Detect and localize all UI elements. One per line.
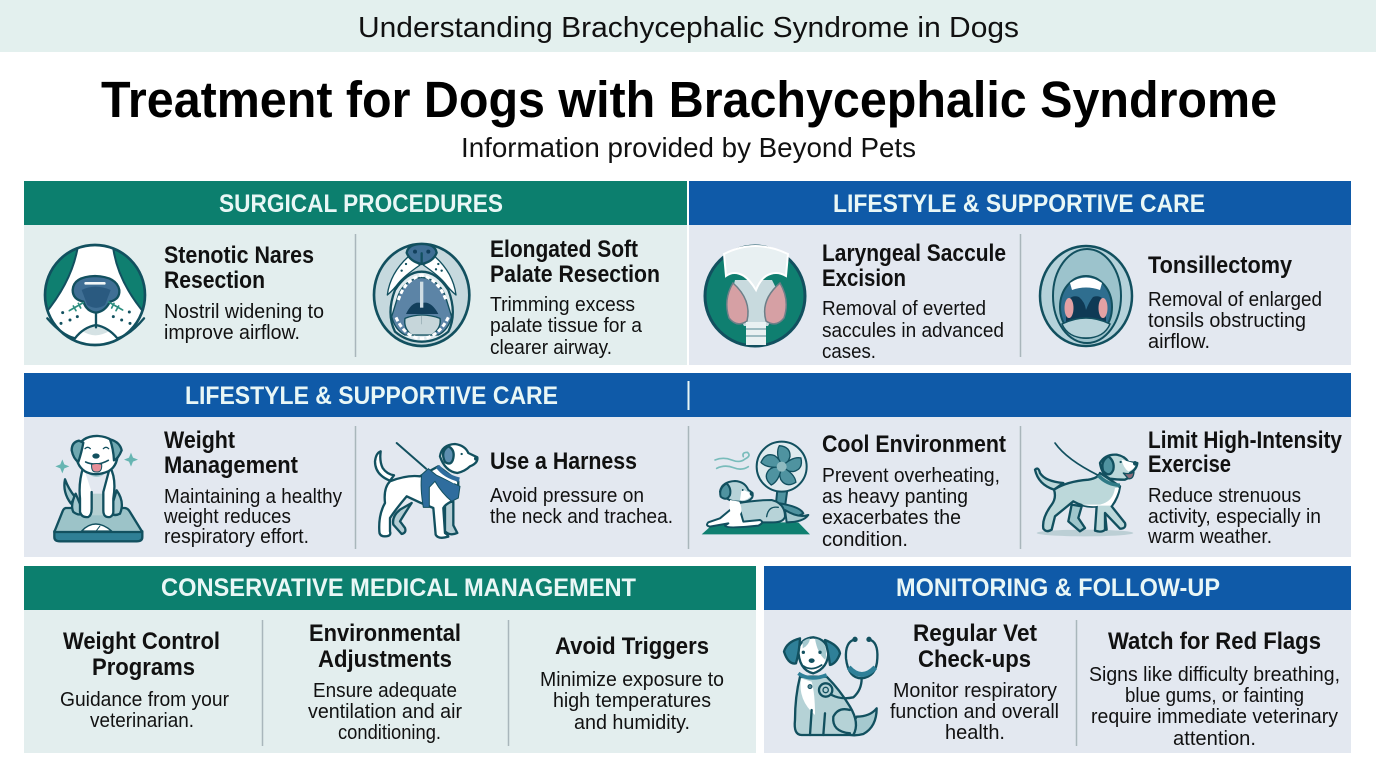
panel: monitoring and follow-up	[764, 566, 1351, 753]
text: regular vet check-ups: Monitor respiratory	[893, 679, 1058, 702]
icon: open mouth palate	[374, 244, 469, 346]
text: environmental adjustments	[308, 620, 462, 744]
heading: lifestyle and supportive care: LIFESTYLE & SUPPORTIVE CARE	[185, 382, 558, 410]
text: laryngeal saccule excision: saccules in advanced	[822, 319, 1004, 342]
text: avoid triggers: Minimize exposure to	[540, 668, 724, 691]
text: cool environment: as heavy panting	[822, 485, 968, 508]
text: laryngeal saccule excision: Removal of everted	[822, 297, 986, 320]
text: use a harness: Avoid pressure on	[490, 484, 644, 507]
text: stenotic nares resection: improve airflow.	[164, 321, 300, 344]
text: weight management: weight reduces	[163, 505, 291, 528]
text: regular vet check-ups: health.	[945, 721, 1005, 744]
text: weight control programs: Guidance from your	[60, 688, 229, 711]
text: watch for red flags: blue gums, or fainting	[1125, 684, 1304, 707]
panel: conservative medical management	[24, 566, 756, 753]
text: cool environment: exacerbates the	[822, 506, 961, 529]
panel: lifestyle and supportive care, top	[689, 181, 1351, 365]
text: tonsillectomy: Removal of enlarged	[1148, 288, 1322, 311]
text: elongated soft palate resection: clearer airway.	[490, 336, 612, 359]
text: weight control programs: veterinarian.	[90, 709, 194, 732]
text: weight control programs	[60, 628, 229, 732]
top banner: Understanding Brachycephalic Syndrome in Dogs	[358, 12, 1019, 44]
text: limit high-intensity exercise: Reduce strenuous	[1148, 484, 1301, 507]
text: laryngeal saccule excision	[822, 240, 1006, 363]
text: limit high-intensity exercise: Exercise	[1148, 451, 1231, 478]
text: weight management: respiratory effort.	[164, 525, 309, 548]
text: cool environment: Cool Environment	[822, 431, 1006, 458]
icon: dog resting by a fan	[702, 442, 810, 534]
heading: lifestyle and supportive care	[689, 181, 1351, 225]
text: weight management: Maintaining a healthy	[164, 485, 343, 508]
panel: surgical procedures	[24, 181, 687, 365]
text: regular vet check-ups	[890, 620, 1059, 744]
heading: surgical procedures: SURGICAL PROCEDURES	[219, 190, 503, 218]
text: use a harness: Use a Harness	[490, 448, 637, 475]
heading: monitoring and follow-up: MONITORING & FOLLOW-UP	[896, 574, 1220, 602]
text: weight control programs: Weight Control	[63, 628, 220, 655]
text: weight management	[163, 427, 343, 548]
icon: dog nose	[44, 243, 146, 350]
text: environmental adjustments: Ensure adequate	[313, 679, 457, 702]
heading: conservative medical management: CONSERVATIVE MEDICAL MANAGEMENT	[161, 574, 636, 602]
text: limit high-intensity exercise	[1147, 427, 1342, 548]
subtitle: Information provided by Beyond Pets	[461, 132, 916, 163]
text: elongated soft palate resection: palate tissue for a	[490, 314, 643, 337]
text: regular vet check-ups: Regular Vet	[913, 620, 1037, 647]
text: watch for red flags: require immediate veterinary	[1091, 705, 1339, 728]
text: stenotic nares resection: Nostril widening to	[164, 300, 324, 323]
icon: larynx	[705, 246, 805, 346]
text: cool environment	[822, 431, 1006, 551]
text: tonsillectomy: airflow.	[1148, 330, 1210, 353]
text: stenotic nares resection: Resection	[164, 267, 265, 294]
text: laryngeal saccule excision: Excision	[822, 265, 906, 292]
text: environmental adjustments: Environmental	[309, 620, 461, 647]
text: use a harness: the neck and trachea.	[490, 505, 673, 528]
text: tonsillectomy: Tonsillectomy	[1148, 252, 1292, 279]
heading: lifestyle and supportive care: LIFESTYLE & SUPPORTIVE CARE	[833, 190, 1205, 218]
text: tonsillectomy	[1148, 252, 1322, 353]
text: regular vet check-ups: Check-ups	[918, 646, 1031, 673]
text: environmental adjustments: Adjustments	[318, 646, 452, 673]
icon: dog on weighing scale	[54, 436, 142, 541]
text: limit high-intensity exercise: activity, especially in	[1148, 505, 1321, 528]
heading: monitoring and follow-up	[764, 566, 1351, 610]
text: avoid triggers: Avoid Triggers	[555, 633, 709, 660]
icon: dog with harness	[375, 443, 478, 538]
text: elongated soft palate resection	[490, 236, 660, 359]
text: stenotic nares resection	[164, 242, 324, 344]
heading: surgical procedures	[24, 181, 687, 225]
text: watch for red flags: Watch for Red Flags	[1108, 628, 1321, 655]
text: watch for red flags	[1089, 628, 1340, 750]
text: use a harness	[490, 448, 673, 528]
text: watch for red flags: Signs like difficulty breathing,	[1089, 663, 1340, 686]
text: stenotic nares resection: Stenotic Nares	[164, 242, 314, 269]
text: laryngeal saccule excision: Laryngeal Saccule	[822, 240, 1006, 267]
heading: conservative medical management	[24, 566, 756, 610]
text: avoid triggers: and humidity.	[574, 711, 690, 734]
text: regular vet check-ups: function and overall	[890, 700, 1059, 723]
text: weight control programs: Programs	[92, 654, 195, 681]
icon: walking dog on leash	[1035, 443, 1137, 536]
text: environmental adjustments: ventilation and air	[308, 700, 462, 723]
text: tonsillectomy: tonsils obstructing	[1148, 309, 1306, 332]
text: avoid triggers	[540, 633, 724, 734]
text: limit high-intensity exercise: Limit High-Intensity	[1148, 427, 1342, 454]
text: limit high-intensity exercise: warm weather.	[1147, 525, 1272, 548]
text: avoid triggers: high temperatures	[553, 689, 711, 712]
text: laryngeal saccule excision: cases.	[822, 340, 876, 363]
text: elongated soft palate resection: Trimming excess	[490, 293, 635, 316]
text: weight management: Management	[164, 452, 298, 479]
icon: dog with stethoscope	[784, 637, 877, 735]
text: environmental adjustments: conditioning.	[338, 721, 441, 744]
text: weight management: Weight	[164, 427, 235, 454]
heading: lifestyle and supportive care	[24, 373, 1351, 417]
panel: lifestyle and supportive care, middle	[24, 373, 1351, 557]
text: cool environment: condition.	[822, 528, 908, 551]
title: Treatment for Dogs with Brachycephalic Syndrome	[101, 71, 1277, 128]
text: watch for red flags: attention.	[1173, 727, 1256, 750]
text: elongated soft palate resection: Elongated Soft	[490, 236, 638, 263]
top banner	[0, 0, 1376, 52]
text: elongated soft palate resection: Palate Resection	[490, 261, 660, 288]
icon: tonsils in open mouth	[1040, 246, 1132, 346]
text: cool environment: Prevent overheating,	[822, 464, 1000, 487]
